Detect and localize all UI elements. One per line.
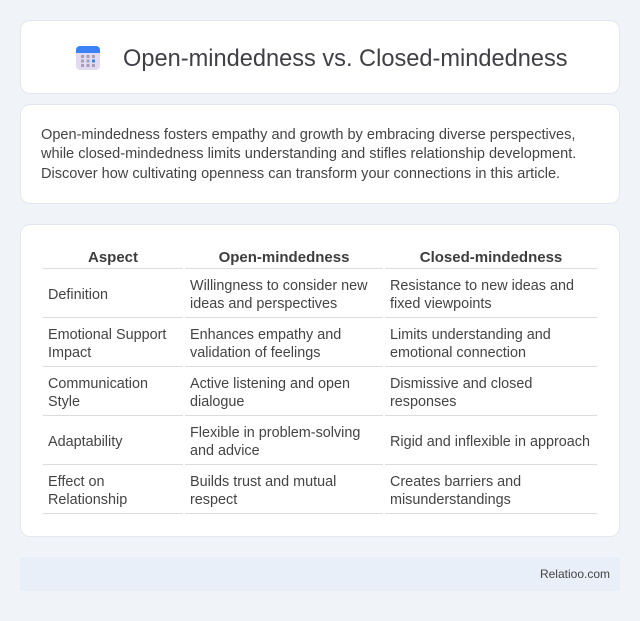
text block: introduction [41,127,576,182]
row: Definition: ideas and perspectives [190,296,337,312]
row: Effect on Relationship [43,474,597,514]
table header row: Closed-mindedness [420,249,562,266]
row: Emotional Support Impact: emotional connection [390,345,526,361]
footer [20,557,620,591]
row: Emotional Support Impact: Enhances empathy and [190,327,341,343]
footer credit: Relatioo.com [540,567,610,581]
row: Definition: Resistance to new ideas and [390,278,574,294]
row: Effect on Relationship: Creates barriers and [390,474,521,490]
row: Adaptability: Rigid and inflexible in approach [390,434,590,450]
row: Effect on Relationship: Builds trust and mutual [190,474,336,490]
panel: comparison table [20,224,620,537]
row: Definition: Willingness to consider new [190,278,368,294]
panel: introduction [20,104,620,204]
row: Effect on Relationship: misunderstandings [390,492,511,508]
row: Communication Style: Communication [48,376,148,392]
table header row: Aspect [88,249,138,266]
row: Adaptability: Adaptability [48,434,122,450]
row: Emotional Support Impact [43,327,597,367]
row: Communication Style: Dismissive and closed [390,376,532,392]
row: Emotional Support Impact: Impact [48,345,91,361]
row: Definition: fixed viewpoints [390,296,492,312]
row: Emotional Support Impact: validation of feelings [190,345,320,361]
row: Communication Style: Style [48,394,80,410]
table header row [43,249,597,269]
row: Adaptability: Flexible in problem-solving [190,425,360,441]
row: Communication Style: dialogue [190,394,244,410]
text block: introduction: Discover how cultivating openness can transform your connections in this article. [41,166,560,182]
text block: introduction: Open-mindedness fosters empathy and growth by embracing diverse perspectives, [41,127,575,143]
title: Open-mindedness vs. Closed-mindedness [123,46,568,72]
row: Definition [43,278,597,318]
row: Communication Style [43,376,597,416]
row: Communication Style: responses [390,394,456,410]
row: Effect on Relationship: Effect on [48,474,105,490]
row: Adaptability: and advice [190,443,260,459]
row: Effect on Relationship: Relationship [48,492,127,508]
row: Adaptability [43,425,597,465]
panel: title header [20,20,620,94]
row: Effect on Relationship: respect [190,492,237,508]
row: Communication Style: Active listening and open [190,376,350,392]
icon: calendar [76,46,100,70]
row: Emotional Support Impact: Limits understanding and [390,327,551,343]
table header row: Open-mindedness [219,249,349,266]
text block: introduction: while closed-mindedness limits understanding and stifles relationship development. [41,146,576,162]
row: Emotional Support Impact: Emotional Support [48,327,166,343]
row: Definition: Definition [48,287,108,303]
